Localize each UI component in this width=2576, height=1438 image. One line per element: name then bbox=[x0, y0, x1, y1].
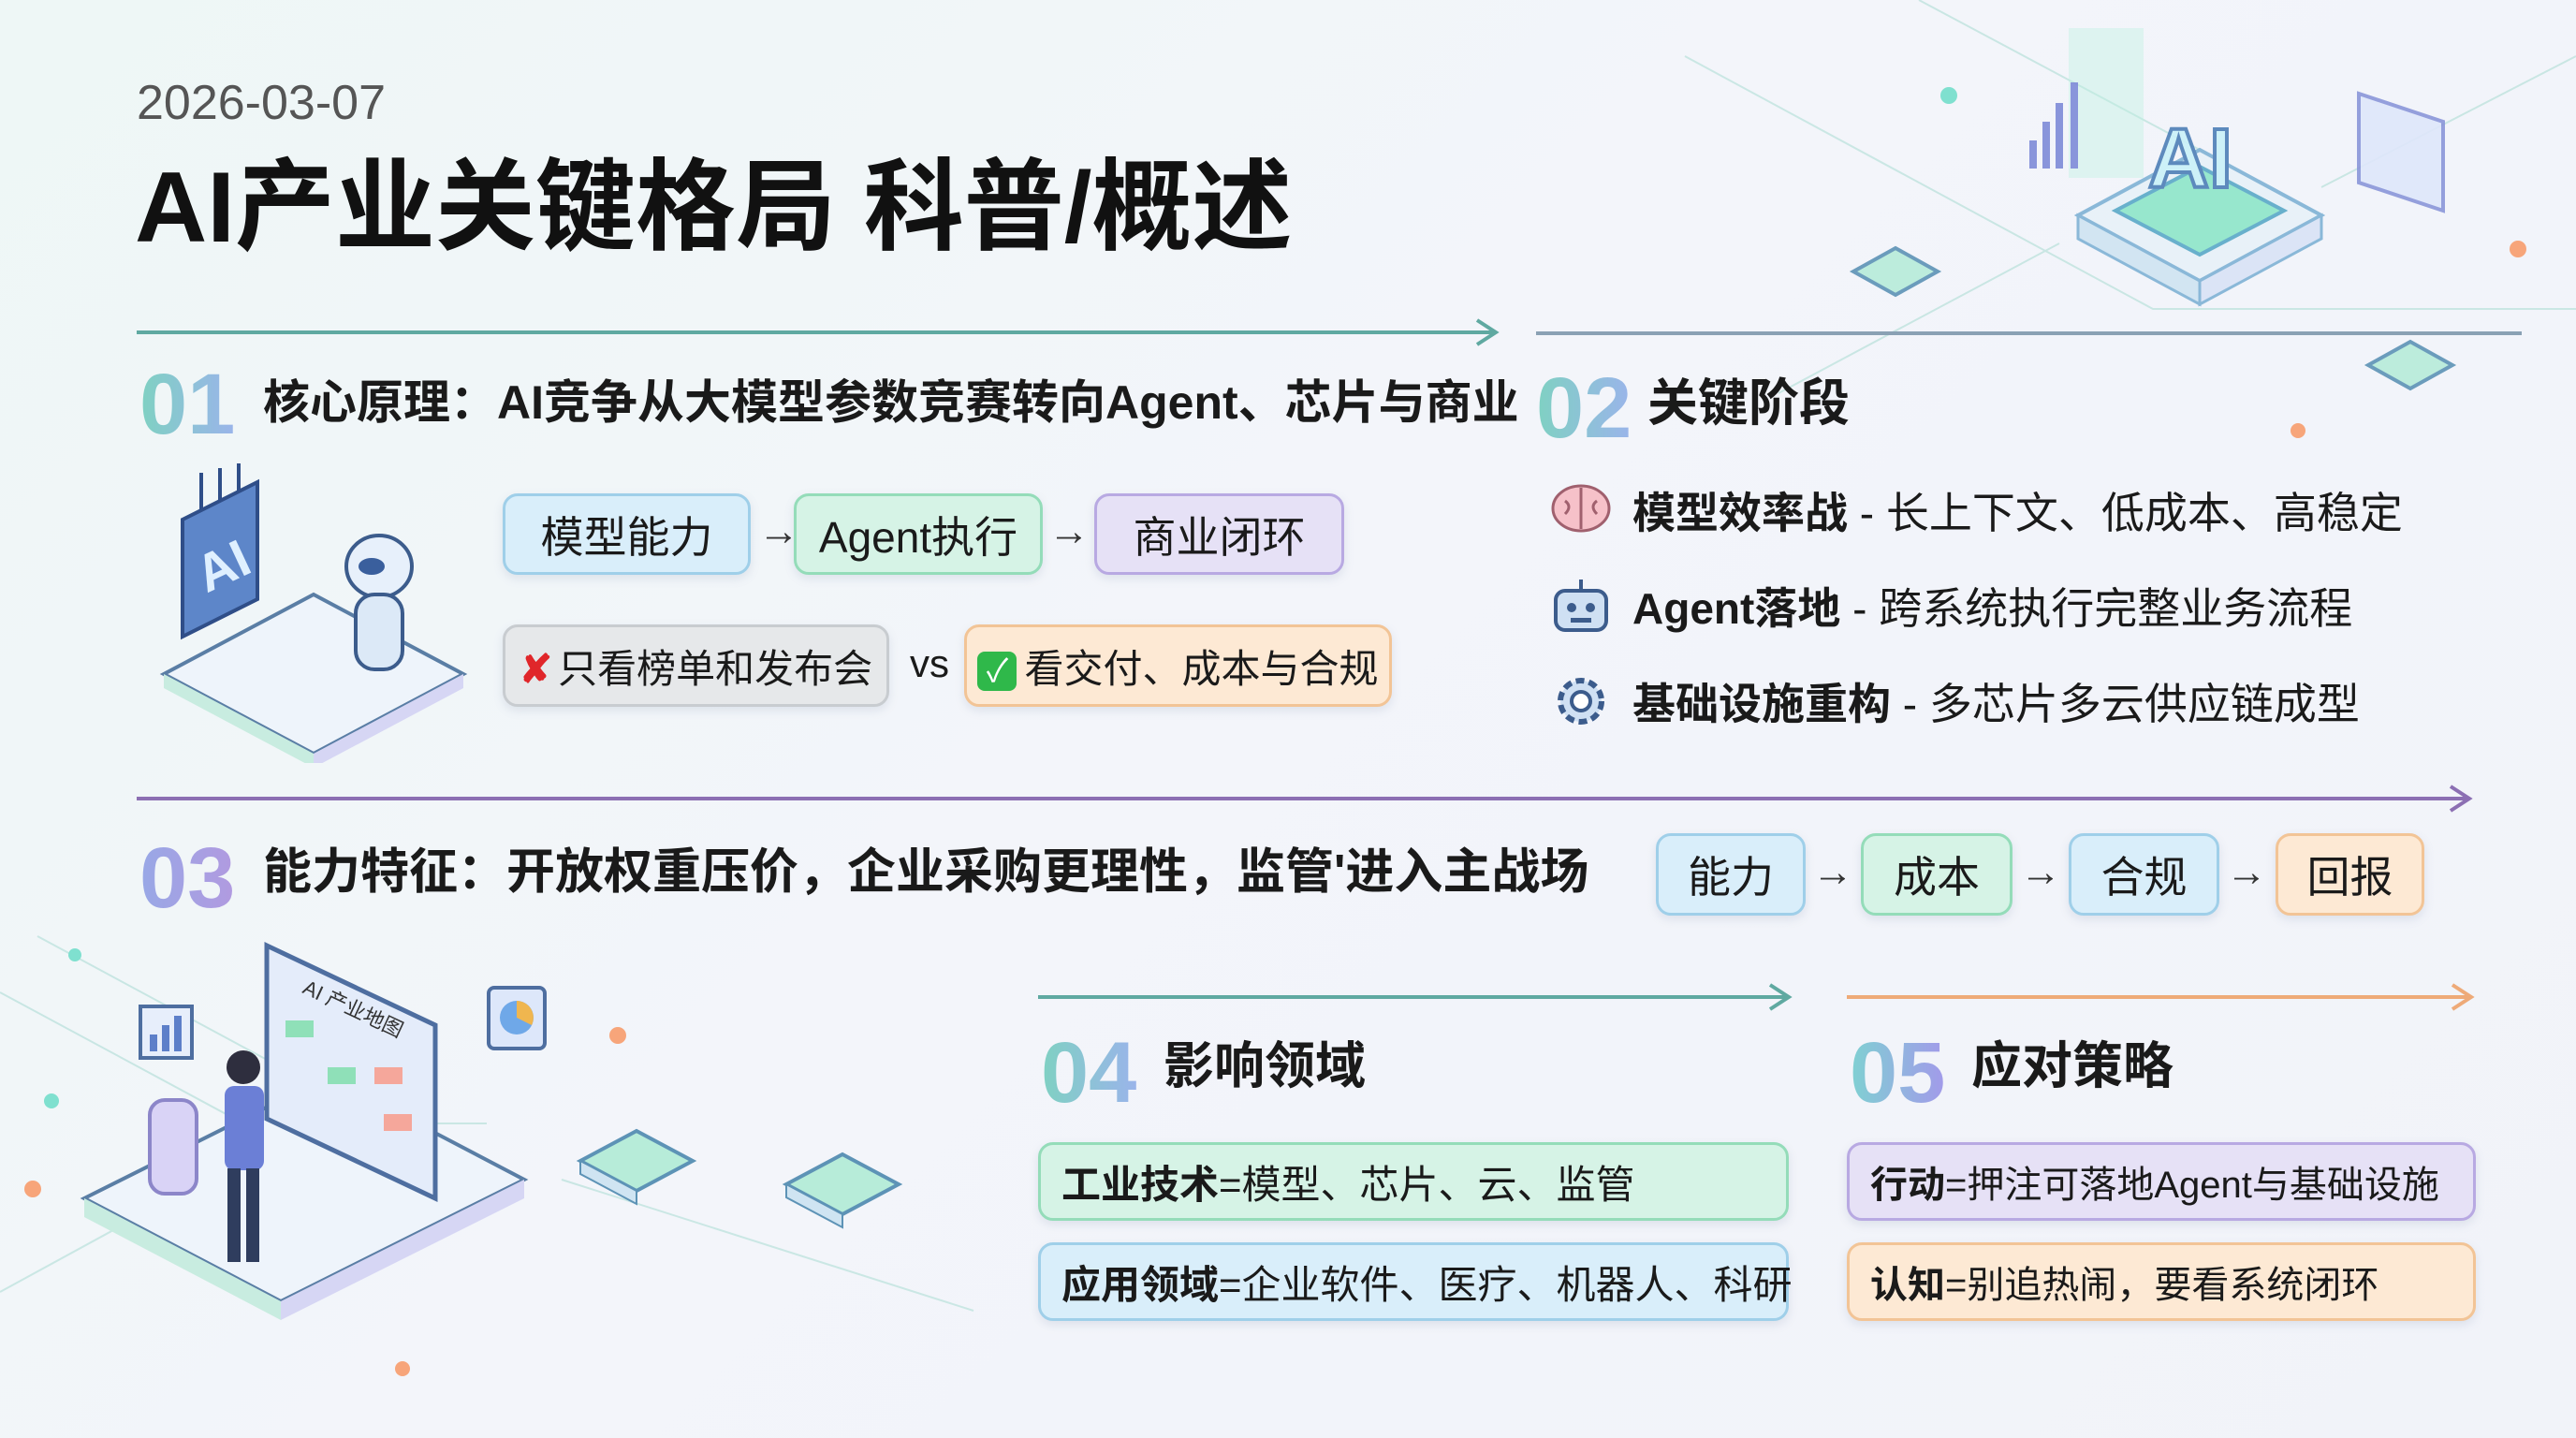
item: action bbox=[1847, 1142, 2476, 1221]
illustration: AI chip and robot: AI bbox=[186, 528, 259, 604]
section 01 bbox=[139, 357, 1519, 763]
section 02 bbox=[1536, 360, 2403, 728]
illustration: analyst with board: AI 产业地图 bbox=[300, 976, 407, 1042]
section 05 bbox=[1845, 1025, 2478, 1327]
date: 2026-03-07 bbox=[137, 76, 386, 130]
section 01: → bbox=[1048, 508, 1090, 554]
01 number: 01 bbox=[139, 357, 235, 452]
item: agent: Agent落地 - 跨系统执行完整业务流程 bbox=[1632, 584, 2352, 633]
section 01: Agent执行 bbox=[819, 513, 1017, 562]
03 number: 03 bbox=[139, 830, 235, 926]
item: model efficiency: 模型效率战 - 长上下文、低成本、高稳定 bbox=[1632, 489, 2403, 537]
item: cognition: 认知=别追热闹，要看系统闭环 bbox=[1870, 1265, 2378, 1306]
illustration: AI chip and robot bbox=[159, 463, 468, 763]
arrow: section 01 divider bbox=[137, 318, 1500, 346]
section 03: 合规 bbox=[2100, 853, 2187, 902]
item: action: 行动=押注可落地Agent与基础设施 bbox=[1870, 1165, 2439, 1206]
05 heading: 应对策略 bbox=[1971, 1038, 2174, 1094]
illustration: top right AI chip: AI bbox=[2148, 112, 2232, 206]
section 03: 回报 bbox=[2306, 853, 2393, 902]
section 03: 成本 bbox=[1894, 853, 1980, 902]
comparison: right: ✓ bbox=[987, 653, 1008, 689]
02 number: 02 bbox=[1536, 360, 1632, 456]
item: industry tech: 工业技术=模型、芯片、云、监管 bbox=[1061, 1163, 1635, 1206]
02 heading: 关键阶段 bbox=[1647, 375, 1850, 432]
05 number: 05 bbox=[1850, 1025, 1945, 1121]
04 heading: 影响领域 bbox=[1164, 1038, 1366, 1094]
arrow: section 05 divider bbox=[1847, 983, 2475, 1011]
comparison: wrong: ✘只看榜单和发布会 bbox=[520, 646, 872, 691]
item: infrastructure: 基础设施重构 - 多芯片多云供应链成型 bbox=[1632, 680, 2360, 728]
illustration: analyst with board bbox=[80, 942, 902, 1320]
icon: gear bbox=[1558, 678, 1604, 725]
comparison: right: 看交付、成本与合规 bbox=[1024, 646, 1378, 691]
section 03: → bbox=[2226, 849, 2267, 895]
icon: brain bbox=[1552, 485, 1610, 532]
icon: robot bbox=[1554, 580, 1608, 632]
section 01: → bbox=[758, 508, 799, 554]
item: cognition bbox=[1847, 1242, 2476, 1321]
flow: model to business bbox=[503, 493, 751, 575]
section 01: 商业闭环 bbox=[1133, 513, 1305, 562]
vs: vs bbox=[910, 641, 949, 685]
section 04 bbox=[1036, 1025, 1793, 1327]
comparison: wrong bbox=[503, 624, 889, 707]
item: applications: 应用领域=企业软件、医疗、机器人、科研 bbox=[1061, 1262, 1793, 1307]
03 heading: 能力特征：开放权重压价，企业采购更理性，监管'进入主战场 bbox=[263, 845, 1588, 900]
illustration: top right AI chip bbox=[1850, 28, 2456, 391]
section 03: → bbox=[1812, 849, 1853, 895]
04 number: 04 bbox=[1041, 1025, 1136, 1121]
01 heading: 核心原理：AI竞争从大模型参数竞赛转向Agent、芯片与商业 bbox=[263, 376, 1519, 429]
item: applications bbox=[1038, 1242, 1789, 1321]
arrow: section 04 divider bbox=[1038, 983, 1792, 1011]
flow: model to business: 模型能力 bbox=[541, 513, 713, 562]
arrow: section 03 divider bbox=[137, 785, 2473, 813]
divider: section 02 bbox=[1536, 331, 2522, 335]
item: industry tech bbox=[1038, 1142, 1789, 1221]
section 03: → bbox=[2020, 849, 2061, 895]
comparison: right bbox=[964, 624, 1392, 707]
flow: capability to return bbox=[1656, 833, 1806, 916]
title: AI产业关键格局 科普/概述 bbox=[135, 151, 1292, 263]
flow: capability to return: 能力 bbox=[1688, 853, 1774, 902]
section 03 bbox=[139, 830, 2426, 926]
